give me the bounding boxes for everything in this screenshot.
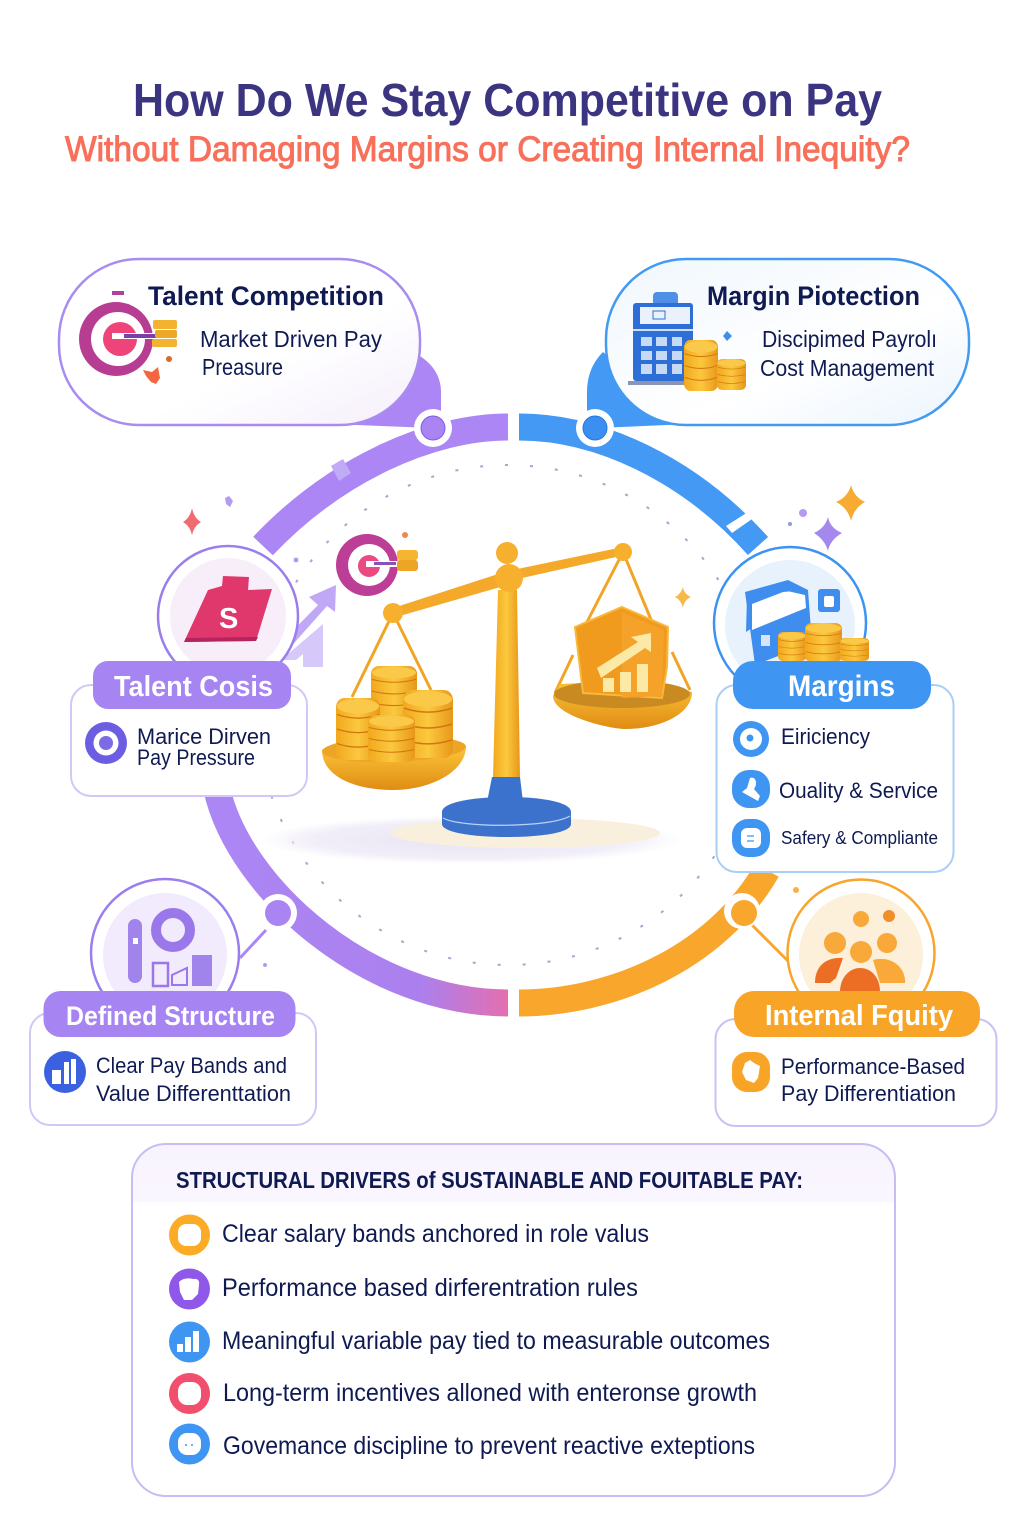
text: disciplined payroll cost management: Discipimed Payrolı (762, 326, 937, 352)
icon: small target near scale (336, 532, 418, 596)
badge circle: talent cost (158, 546, 298, 686)
icon: target with coins (79, 291, 177, 384)
text: quality and service: Ouality & Service (779, 778, 938, 803)
icon: calculator with coins (628, 292, 746, 391)
heading pill: defined structure: Defined Structure (66, 1001, 275, 1031)
floor shadow under scale (260, 816, 680, 864)
panel: structural drivers (132, 1144, 895, 1496)
ring segment: internal equity (orange) (519, 870, 767, 1003)
text: defined structure description: Clear Pay Bands and (96, 1053, 287, 1078)
heading pill: internal equity (734, 991, 980, 1037)
heading pill: talent cost (93, 661, 291, 709)
heading: structural drivers: STRUCTURAL DRIVERS of SUSTAINABLE AND FOUITABLE PAY: (176, 1167, 803, 1193)
heading: talent competition: Talent Competition (148, 281, 384, 311)
node: talent competition (414, 409, 452, 447)
driver 1: Clear salary bands anchored in role valus (222, 1220, 649, 1248)
text: internal equity description: Performance-Based (781, 1054, 965, 1079)
driver 4: Long-term incentives alloned with enteronse growth (223, 1379, 757, 1407)
driver 2: Performance based dirferentration rules (222, 1274, 638, 1302)
driver 1 (169, 1214, 649, 1256)
connector: defined structure (240, 930, 266, 958)
driver 3 (169, 1322, 770, 1362)
ring segment: margin protection (blue) (519, 352, 758, 546)
heading pill: talent cost: Talent Cosis (114, 671, 273, 703)
text: disciplined payroll cost management (760, 326, 937, 381)
icon: growth arrows (262, 585, 336, 668)
ring segment: talent competition (purple) (263, 356, 508, 546)
node: internal equity (724, 893, 760, 929)
icon: safety and compliance (732, 819, 770, 857)
text: talent cost description: Pay Pressure (137, 745, 255, 770)
badge circle: talent cost: S (219, 603, 238, 635)
text: defined structure description: Value Differenttation (96, 1081, 291, 1106)
heading pill: margins (733, 661, 931, 709)
text: internal equity description (781, 1054, 965, 1106)
card body: margins (716, 685, 954, 872)
text: market driven pay pressure: Preasure (202, 354, 283, 380)
panel: talent cost (71, 546, 307, 796)
panel: talent competition (59, 259, 420, 425)
node: defined structure (259, 894, 297, 932)
driver 5 (169, 1424, 755, 1464)
card body: defined structure (30, 1013, 316, 1125)
driver 5: Govemance discipline to prevent reactive exteptions (223, 1432, 755, 1460)
icon: target bullet (85, 722, 127, 764)
text: defined structure description (96, 1053, 291, 1106)
text: market driven pay pressure (200, 326, 382, 380)
text: safety and compliance: Safery & Compliante (781, 828, 938, 848)
text: market driven pay pressure: Market Driven Pay (200, 326, 382, 352)
text: internal equity description: Pay Differentiation (781, 1081, 956, 1106)
heading pill: margins: Margins (788, 670, 895, 703)
driver 3: Meaningful variable pay tied to measurable outcomes (222, 1327, 770, 1355)
driver 2 (169, 1268, 638, 1310)
right pan with shield (553, 607, 692, 729)
panel: margins (714, 547, 954, 872)
subtitle: Without Damaging Margins or Creating Internal Inequity? (65, 130, 910, 169)
sparkles (183, 485, 865, 967)
heading pill: defined structure (44, 991, 296, 1037)
scale joints (383, 543, 632, 623)
title: How Do We Stay Competitive on Pay (133, 74, 882, 126)
heading pill: internal equity: Internal Fquity (765, 1000, 953, 1032)
badge circle: internal equity (788, 880, 934, 1026)
driver 4 (169, 1373, 757, 1414)
text: talent cost description: Marice Dirven (137, 724, 271, 749)
panel: internal equity (716, 880, 996, 1126)
scale base (442, 777, 571, 837)
text: disciplined payroll cost management: Cost Management (760, 355, 935, 381)
card body: talent cost (71, 685, 307, 796)
card body: internal equity (716, 1019, 996, 1126)
badge circle: margins (714, 547, 869, 699)
connector: internal equity (752, 925, 788, 961)
scale hub (495, 542, 523, 592)
icon: quality and service (732, 770, 770, 808)
dotted inner ring (258, 465, 758, 965)
icon: balance scale (322, 542, 692, 837)
scale strings (352, 552, 690, 697)
node: margin protection (576, 409, 614, 447)
scale column (493, 590, 520, 777)
scale beam (393, 547, 625, 617)
icon: efficiency (733, 721, 769, 757)
icon: bars bullet (44, 1051, 86, 1093)
badge circle: defined structure (91, 879, 239, 1027)
text: talent cost description (137, 724, 271, 770)
text: efficiency: Eiriciency (781, 724, 870, 749)
left pan with coins (322, 666, 466, 790)
panel: margin protection (606, 259, 969, 425)
icon: equity bullet (732, 1052, 770, 1092)
panel: defined structure (30, 879, 316, 1125)
ring segment: defined structure (purple to pink) (217, 790, 508, 1003)
heading: margin protection: Margin Piotection (707, 281, 920, 311)
